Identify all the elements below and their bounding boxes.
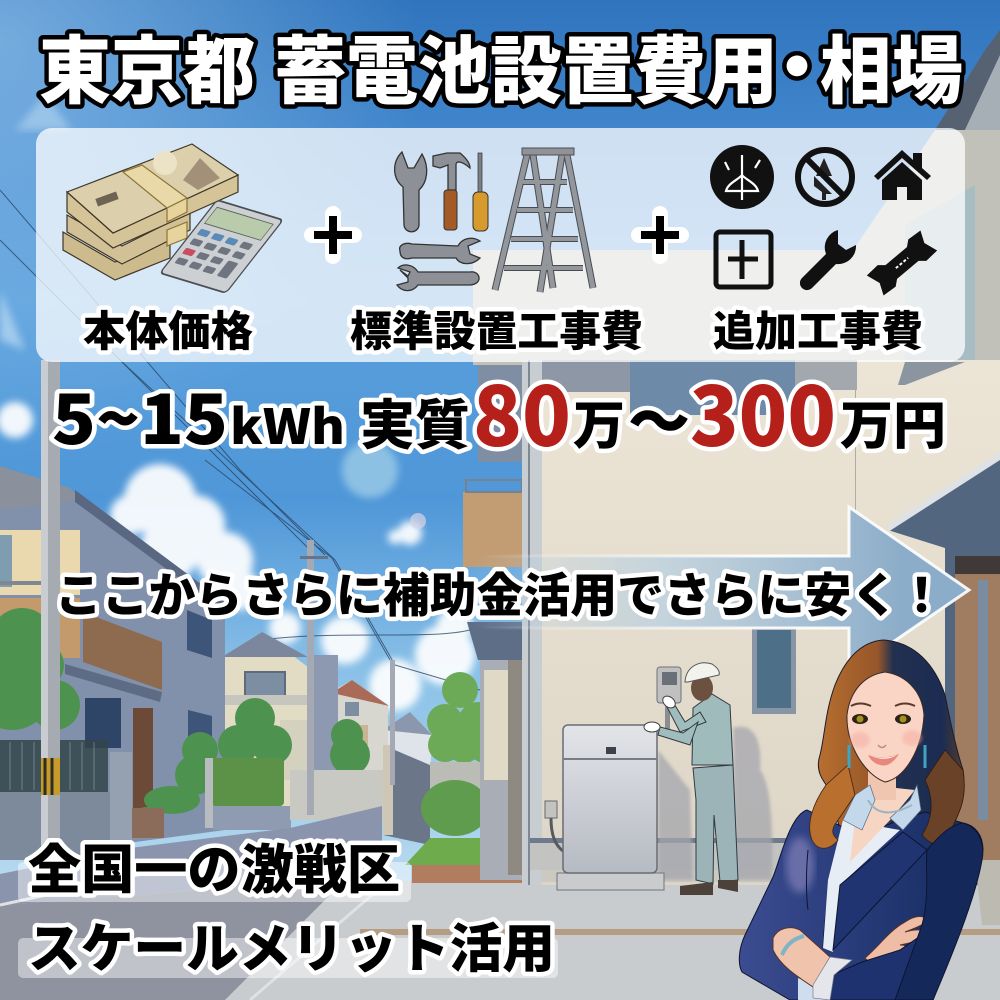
title bbox=[39, 9, 963, 119]
icon: black circle tool mark bbox=[710, 145, 774, 209]
trees and hedges bbox=[0, 608, 502, 823]
price range: 実質 bbox=[360, 381, 470, 460]
front lapel bbox=[833, 832, 927, 950]
icon: breaker box bbox=[716, 232, 771, 287]
far houses bbox=[225, 632, 432, 810]
label: standard installation cost: 標準設置工事費 bbox=[350, 298, 643, 359]
right house wall bbox=[473, 30, 1000, 885]
icon: hand tools bbox=[395, 152, 488, 291]
price range: 5~15 bbox=[52, 365, 228, 464]
icon: wrench bbox=[800, 230, 856, 290]
necklace bbox=[868, 800, 912, 812]
cuff bbox=[813, 957, 852, 1000]
forearm bbox=[773, 928, 830, 987]
plus sign 2 bbox=[639, 214, 681, 256]
title: 相場 bbox=[820, 12, 963, 119]
icon: step ladder bbox=[495, 148, 593, 292]
arrow pointing right bbox=[470, 507, 969, 672]
fences and walls bbox=[0, 740, 508, 860]
wall monitor panel bbox=[657, 667, 681, 730]
battery storage unit bbox=[545, 725, 664, 890]
label: main unit price: 本体価格 bbox=[83, 298, 253, 359]
price range: 万円 bbox=[840, 384, 946, 459]
installation worker bbox=[644, 663, 738, 895]
title: 蓄電池設置費用 bbox=[274, 12, 778, 119]
left house bbox=[0, 466, 225, 860]
power lines bbox=[0, 190, 480, 690]
face bbox=[847, 672, 924, 782]
neck bbox=[868, 768, 896, 800]
hair bbox=[818, 640, 964, 830]
price range: 300 bbox=[690, 351, 836, 470]
title: 東京都 bbox=[39, 12, 255, 119]
label: additional work cost: 追加工事費 bbox=[713, 298, 923, 359]
plus sign 1 bbox=[312, 214, 354, 256]
fingers bbox=[865, 916, 927, 963]
chest bbox=[850, 785, 915, 862]
entrance and door bbox=[888, 452, 1000, 925]
info panel bbox=[36, 128, 965, 362]
left lapel line bbox=[806, 830, 843, 948]
jacket highlight bbox=[786, 837, 814, 893]
bottom note: scale merit: スケールメリット活用 bbox=[28, 907, 555, 983]
left shirt sleeve bbox=[798, 978, 830, 1000]
right arm bbox=[895, 823, 983, 1000]
icon: house bbox=[874, 150, 931, 200]
callout: subsidy message: ここからさらに補助金活用でさらに安く！ bbox=[55, 557, 945, 626]
price range: ～ bbox=[628, 372, 690, 462]
price range: 80 bbox=[473, 351, 571, 470]
price range: 万 bbox=[573, 384, 625, 459]
worker's shadow bbox=[658, 727, 772, 880]
utility poles bbox=[41, 360, 395, 850]
right hair lock bbox=[922, 750, 964, 844]
shirt bbox=[823, 820, 900, 952]
icon: calculator bbox=[160, 200, 283, 293]
left hair lock bbox=[810, 765, 855, 848]
garden: bush, grass and bricks bbox=[405, 780, 522, 883]
collar bbox=[843, 785, 921, 830]
jacket bbox=[739, 810, 983, 1000]
title: ・ bbox=[760, 9, 834, 116]
price range: kWh bbox=[230, 388, 345, 458]
balcony and neighbouring building bbox=[463, 362, 525, 880]
icon: stacks of yen banknotes bbox=[63, 144, 238, 280]
presenter woman bbox=[739, 640, 983, 1000]
bracelet bbox=[782, 936, 804, 955]
ground: road and pavement bbox=[0, 806, 1000, 1000]
price range bbox=[52, 351, 946, 470]
bottom note: fiercest market: 全国一の激戦区 bbox=[28, 828, 400, 904]
crossed sleeve bbox=[830, 912, 955, 1000]
icon: prohibition mark bbox=[798, 150, 852, 204]
icon: double-ended wrench bbox=[866, 230, 938, 296]
